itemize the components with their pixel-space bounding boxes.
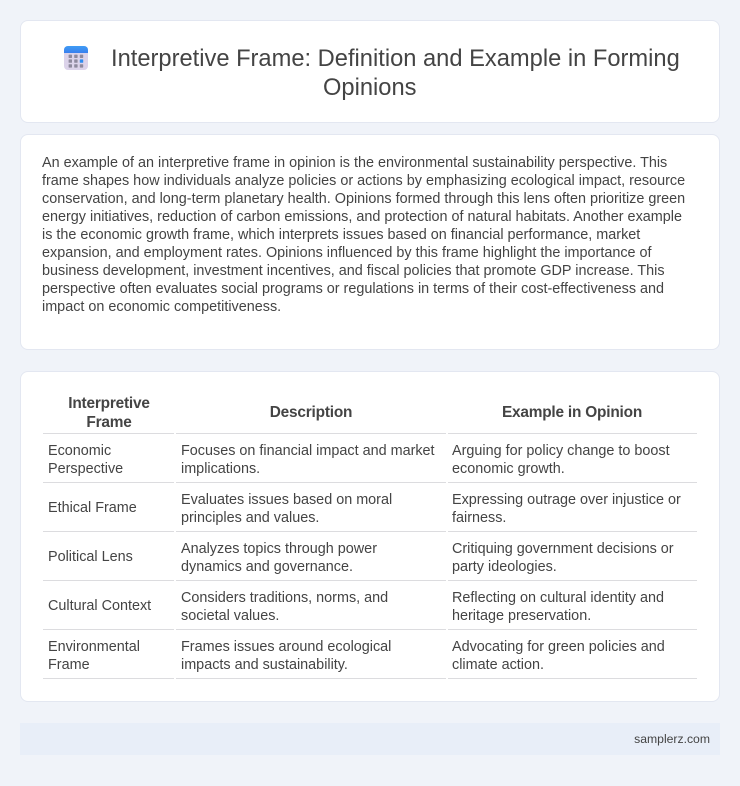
row: Environmental Frame: Environmental: [48, 639, 140, 655]
row: Environmental Frame: impacts and sustainability.: [181, 657, 348, 673]
row: Political Lens: [48, 541, 674, 575]
row: Cultural Context: Reflecting on cultural identity and: [452, 590, 664, 606]
text block: description: perspective often evaluates social programs or regulations in terms of their cost-effectiveness and: [42, 281, 664, 297]
row: Economic Perspective: economic growth.: [452, 461, 565, 477]
row: Economic Perspective: Arguing for policy change to boost: [452, 443, 670, 459]
row: Political Lens: Analyzes topics through power: [181, 541, 377, 557]
row: Political Lens: party ideologies.: [452, 559, 557, 575]
row: Economic Perspective: implications.: [181, 461, 260, 477]
row: Cultural Context: [48, 590, 664, 624]
row: Environmental Frame: Frame: [48, 657, 90, 673]
row: Political Lens: Political Lens: [48, 549, 133, 565]
text block: description: energy initiatives, reduction of carbon emissions, and protection of natural habitats. Another example: [42, 209, 682, 225]
row: Ethical Frame: Expressing outrage over injustice or: [452, 492, 681, 508]
text block: description: frame shapes how individuals analyze policies or actions by emphasizing ecological impact, resource: [42, 173, 685, 189]
row: Cultural Context: societal values.: [181, 608, 279, 624]
footer text: samplerz.com: [634, 732, 710, 746]
footer: [20, 723, 720, 755]
row: Economic Perspective: Perspective: [48, 461, 123, 477]
text block: description: An example of an interpretive frame in opinion is the environmental sustainability perspective. This: [42, 155, 667, 171]
title: [111, 46, 680, 101]
row: Economic Perspective: Economic: [48, 443, 111, 459]
text block: description: conservation, and long-term planetary health. Opinions formed through this lens often prioritize green: [42, 191, 685, 207]
text block: description: impact on economic competitiveness.: [42, 299, 281, 315]
title: Opinions: [323, 75, 416, 101]
row: Ethical Frame: Ethical Frame: [48, 500, 137, 516]
row: Environmental Frame: Frames issues around ecological: [181, 639, 391, 655]
row: Environmental Frame: climate action.: [452, 657, 544, 673]
row: Environmental Frame: [48, 639, 665, 673]
row: Political Lens: dynamics and governance.: [181, 559, 353, 575]
title: Interpretive Frame: Definition and Example in Forming: [111, 46, 680, 72]
row: Ethical Frame: fairness.: [452, 510, 506, 526]
row: Political Lens: Critiquing government decisions or: [452, 541, 674, 557]
icon: calendar: [64, 46, 88, 70]
row: Cultural Context: Cultural Context: [48, 598, 151, 614]
text block: description: expansion, and employment rates. Opinions influenced by this frame highlight the importance of: [42, 245, 652, 261]
text block: description: business development, investment incentives, and fiscal policies that promote GDP increase. This: [42, 263, 665, 279]
row: Environmental Frame: Advocating for green policies and: [452, 639, 665, 655]
row: Economic Perspective: [48, 443, 670, 477]
row: Ethical Frame: [48, 492, 681, 526]
row: Cultural Context: Considers traditions, norms, and: [181, 590, 388, 606]
text block: description: is the economic growth frame, which interprets issues based on financial performance, market: [42, 227, 640, 243]
panel: description card: [20, 134, 720, 350]
row: Ethical Frame: principles and values.: [181, 510, 319, 526]
table header: Interpretive Frame: [68, 395, 150, 431]
table header: Interpretive Frame: Frame: [86, 414, 132, 431]
row: Economic Perspective: Focuses on financial impact and market: [181, 443, 435, 459]
table header: Description: Description: [270, 404, 352, 421]
text block: description: [42, 155, 685, 315]
panel: table card: [20, 371, 720, 702]
title card: [20, 20, 720, 123]
row: Ethical Frame: Evaluates issues based on moral: [181, 492, 392, 508]
table header: Example in Opinion: Example in Opinion: [502, 404, 642, 421]
row: Cultural Context: heritage preservation.: [452, 608, 591, 624]
table header: Interpretive Frame: Interpretive: [68, 395, 150, 412]
